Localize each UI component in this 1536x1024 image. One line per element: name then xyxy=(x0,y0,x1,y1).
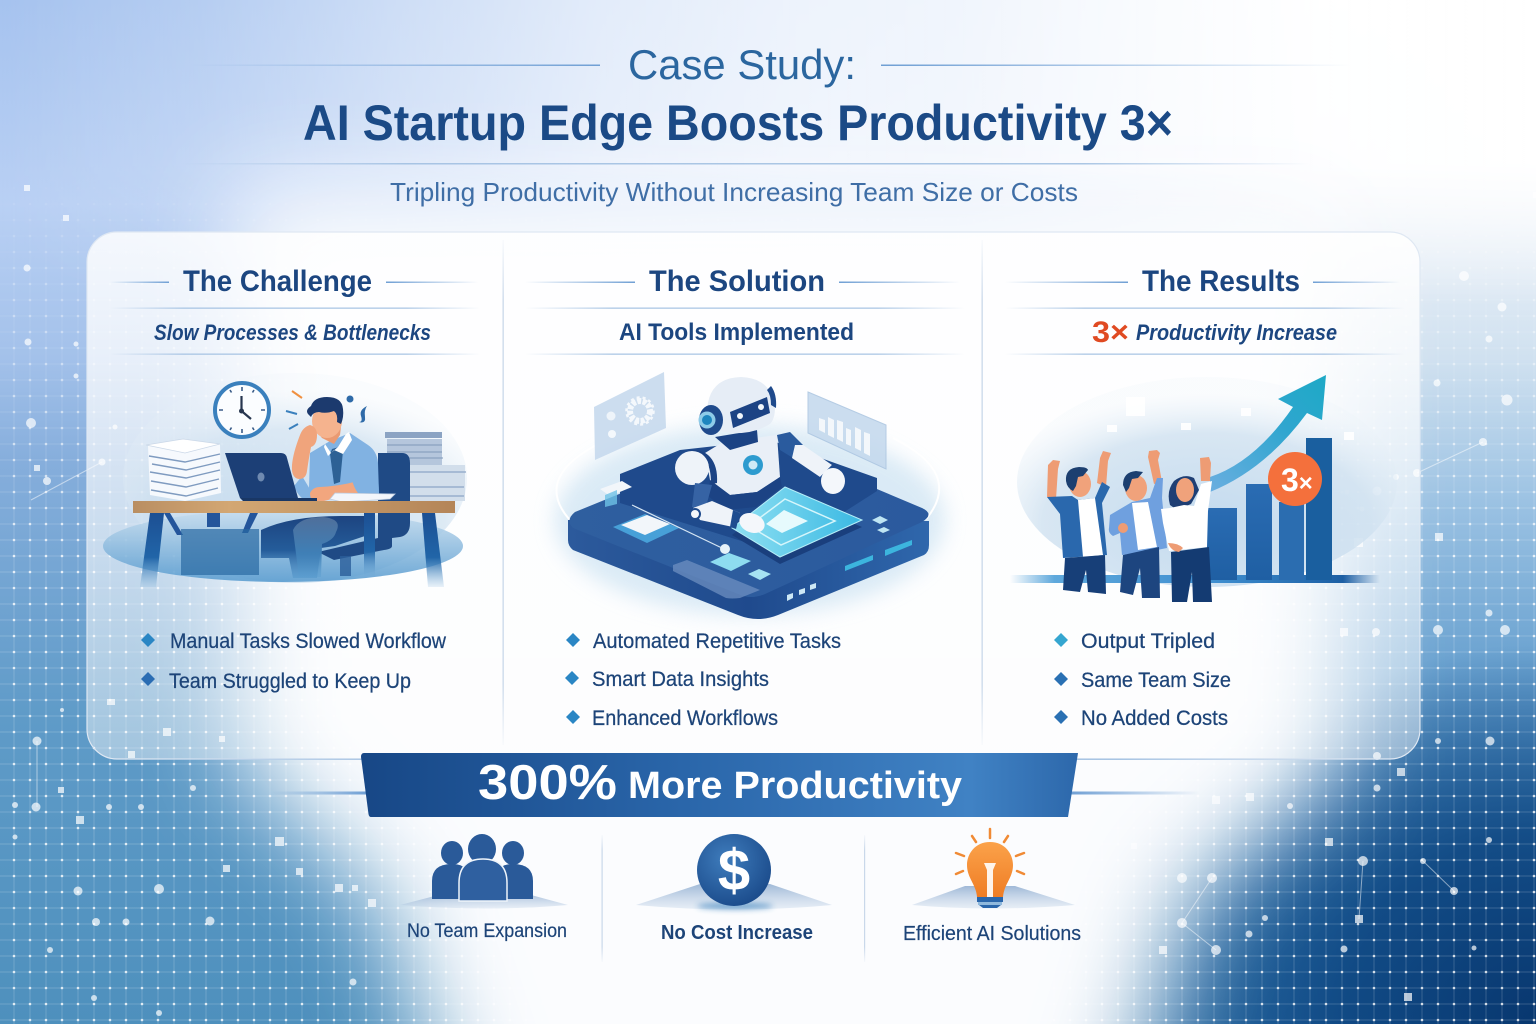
illustration: team celebrating growth xyxy=(1010,375,1397,602)
torso xyxy=(705,435,780,495)
person 1 xyxy=(1047,451,1111,594)
subheading: the results: Productivity Increase xyxy=(1136,320,1337,345)
heading: the challenge: The Challenge xyxy=(183,265,372,298)
banner value: 300% xyxy=(478,756,617,810)
benefit: no cost increase xyxy=(636,834,832,944)
head xyxy=(707,377,775,433)
bullet list: the results: No Added Costs xyxy=(1081,707,1228,730)
desk and legs xyxy=(133,501,455,587)
subtitle: Tripling Productivity Without Increasing Team Size or Costs xyxy=(390,177,1078,207)
robot xyxy=(675,377,845,536)
bullet list: the challenge xyxy=(141,630,447,693)
icon: clock xyxy=(215,383,269,437)
lower arm xyxy=(310,481,361,503)
floor line xyxy=(1010,575,1380,583)
bullet list: the solution: Enhanced Workflows xyxy=(592,707,778,730)
panel: the solution xyxy=(525,265,965,730)
banner label: More Productivity xyxy=(628,765,962,807)
subheading: the results: 3× xyxy=(1092,316,1129,349)
benefit: no cost increase: $ xyxy=(718,838,750,903)
subheading: the challenge: Slow Processes & Bottlenecks xyxy=(154,320,431,345)
badge: 3x: 3× xyxy=(1281,462,1313,498)
stress marks xyxy=(286,391,367,429)
growth arrow xyxy=(1210,375,1326,492)
illustration: stressed worker at desk xyxy=(103,373,467,587)
label: No Cost Increase xyxy=(661,922,813,944)
paper stack right xyxy=(385,432,466,501)
platform xyxy=(568,440,929,619)
growth bars xyxy=(1207,438,1332,580)
bullet list: the results: Output Tripled xyxy=(1081,630,1215,653)
right arm xyxy=(777,432,803,458)
panel: gear screen xyxy=(594,372,666,460)
bullet list: the challenge: Team Struggled to Keep Up xyxy=(169,670,411,693)
title line 2: AI Startup Edge Boosts Productivity 3× xyxy=(303,95,1173,151)
heading: the results: The Results xyxy=(1142,265,1300,298)
paper stack left xyxy=(146,439,221,501)
torso xyxy=(309,433,379,500)
benefits row xyxy=(400,829,1081,962)
holographic chip screen xyxy=(732,487,862,564)
bullet list: the challenge: Manual Tasks Slowed Workflow xyxy=(170,630,447,653)
heading: the solution: The Solution xyxy=(649,265,825,298)
label: Efficient AI Solutions xyxy=(903,923,1081,945)
benefit: no team expansion xyxy=(400,834,568,942)
title line 1: Case Study: xyxy=(628,41,856,88)
raised arm xyxy=(292,425,317,479)
person 2 xyxy=(1109,450,1167,598)
subheading: the solution: AI Tools Implemented xyxy=(619,319,854,346)
illustration: robot on AI platform xyxy=(555,372,945,619)
panel: the results xyxy=(1005,265,1405,730)
bullet list: the solution: Automated Repetitive Tasks xyxy=(593,630,841,653)
subheading: the results xyxy=(1092,316,1337,349)
title block xyxy=(180,41,1351,207)
head xyxy=(317,427,341,444)
panel: chart screen xyxy=(808,392,886,469)
chair xyxy=(318,453,410,576)
panel: the challenge xyxy=(103,265,480,693)
bullet list: the solution: Smart Data Insights xyxy=(592,668,769,691)
label: No Team Expansion xyxy=(407,921,567,942)
inner dark block xyxy=(620,440,877,553)
orbit arcs xyxy=(556,438,939,525)
banner: 300% more productivity xyxy=(270,753,1200,817)
bullet list: the solution xyxy=(565,630,841,730)
left arm xyxy=(688,450,717,484)
bullet list: the results: Same Team Size xyxy=(1081,669,1231,692)
laptop xyxy=(225,453,317,501)
main panel xyxy=(87,232,1420,760)
benefit: efficient AI solutions xyxy=(903,829,1081,945)
man xyxy=(292,397,395,503)
badge: 3x xyxy=(1268,452,1322,506)
person 3 xyxy=(1161,457,1212,602)
bullet list: the results xyxy=(1054,630,1231,730)
